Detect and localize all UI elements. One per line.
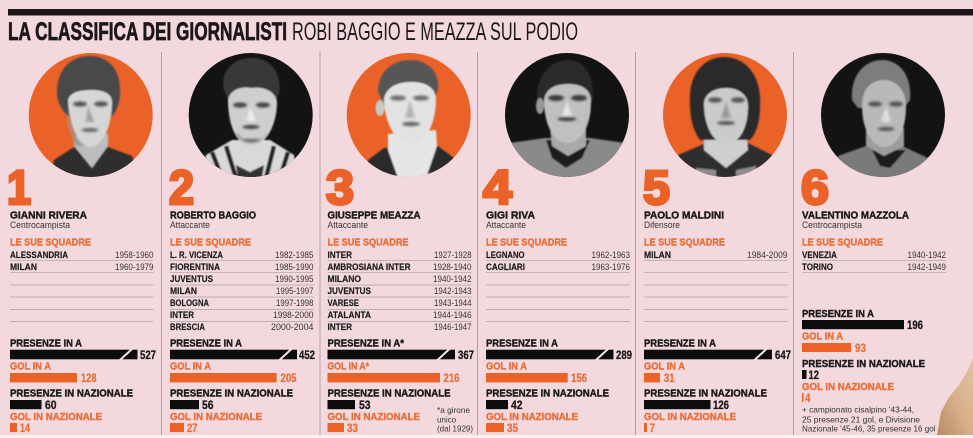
stats bars: PRESENZE IN A: [10, 338, 82, 350]
stats bars: 12: [808, 370, 819, 382]
panel: Gianni Rivera: [7, 52, 156, 435]
teams table: AMBROSIANA INTER: [328, 262, 411, 272]
stats bars: PRESENZE IN NAZIONALE: [644, 388, 767, 400]
panel: Paolo Maldini: [643, 52, 791, 435]
stats bars: [328, 338, 474, 435]
teams table: MILAN: [10, 262, 37, 272]
player name: GIANNI RIVERA: [10, 210, 87, 222]
stats bars: GOL IN NAZIONALE: [10, 411, 102, 423]
stats bars: 60: [45, 400, 56, 412]
panel: Gigi Riva: [483, 52, 632, 435]
stats bars: [644, 338, 791, 435]
stats bars: GOL IN NAZIONALE: [802, 381, 894, 393]
teams table: [802, 250, 946, 273]
teams table: TORINO: [802, 262, 833, 272]
teams table: 1943-1944: [434, 298, 472, 308]
footnote: [437, 406, 473, 434]
teams table: [486, 250, 630, 322]
teams table: 1962-1963: [592, 250, 630, 260]
stats bars: PRESENZE IN A: [486, 338, 558, 350]
footnote: (dal 1929): [437, 425, 473, 434]
stats bars: GOL IN A: [644, 361, 685, 373]
teams table: MILAN: [644, 250, 671, 260]
stats bars: 367: [458, 350, 474, 362]
teams table: MILANO: [328, 274, 361, 284]
player name: VALENTINO MAZZOLA: [802, 210, 909, 222]
teams heading: LE SUE SQUADRE: [644, 237, 725, 249]
teams table: 1998-2000: [273, 310, 314, 320]
stats bars: PRESENZE IN A: [802, 308, 874, 320]
teams table: 1985-1990: [275, 262, 314, 272]
stats bars: 53: [359, 400, 370, 412]
stats bars: [10, 338, 156, 435]
teams table: 1940-1942: [908, 250, 946, 260]
teams table: L. R. VICENZA: [170, 250, 223, 260]
stats bars: 7: [650, 423, 655, 435]
teams table: JUVENTUS: [328, 286, 371, 296]
teams table: VARESE: [328, 298, 359, 308]
player name: GIUSEPPE MEAZZA: [328, 210, 421, 222]
stats bars: 93: [855, 343, 866, 355]
stats bars: 14: [20, 423, 30, 435]
stats bars: PRESENZE IN A: [644, 338, 716, 350]
teams heading: LE SUE SQUADRE: [328, 237, 408, 249]
teams heading: LE SUE SQUADRE: [170, 237, 251, 249]
teams table: [170, 250, 314, 332]
panel: Giuseppe Meazza: [326, 52, 474, 435]
teams heading: LE SUE SQUADRE: [10, 237, 91, 249]
panel: Roberto Baggio: [169, 52, 315, 435]
player role: Attaccante: [486, 220, 526, 230]
teams table: 1940-1942: [433, 274, 472, 284]
stats bars: PRESENZE IN NAZIONALE: [328, 388, 450, 400]
stats bars: [802, 308, 925, 405]
stats bars: GOL IN NAZIONALE: [328, 411, 420, 423]
stats bars: 56: [202, 400, 214, 412]
footnote: [802, 406, 936, 434]
player name: PAOLO MALDINI: [644, 210, 724, 222]
stats bars: PRESENZE IN NAZIONALE: [170, 388, 293, 400]
stats bars: GOL IN NAZIONALE: [170, 411, 262, 423]
teams heading: LE SUE SQUADRE: [802, 237, 883, 249]
footnote: 25 presenze 21 gol, e Divisione: [802, 416, 920, 424]
stats bars: [170, 338, 315, 435]
portrait: Giuseppe Meazza: [346, 52, 472, 178]
photo fragment: bottom right: [937, 358, 973, 435]
teams table: 1982-1985: [275, 250, 314, 260]
stats bars: 156: [571, 373, 587, 385]
stats bars: 27: [187, 423, 198, 435]
teams table: 1944-1946: [433, 310, 472, 320]
portrait: Gianni Rivera: [28, 52, 154, 178]
portrait: Roberto Baggio: [188, 52, 314, 178]
portrait: Paolo Maldini: [663, 52, 787, 178]
teams table: ATALANTA: [328, 310, 371, 320]
stats bars: GOL IN A: [170, 361, 211, 373]
teams table: 2000-2004: [271, 322, 314, 332]
footnote: + campionato cisalpino '43-44,: [802, 406, 914, 415]
teams table: 1946-1947: [434, 322, 472, 332]
stats bars: GOL IN A: [802, 330, 843, 342]
stats bars: PRESENZE IN A: [170, 338, 242, 350]
player name: ROBERTO BAGGIO: [170, 210, 256, 222]
stats bars: 4: [805, 393, 811, 405]
stats bars: GOL IN NAZIONALE: [644, 411, 736, 423]
footnote: unico: [437, 416, 456, 425]
teams table: FIORENTINA: [170, 262, 220, 272]
teams table: 1984-2009: [747, 250, 788, 260]
stats bars: 35: [507, 423, 519, 435]
stats bars: 216: [444, 373, 460, 385]
teams table: INTER: [170, 310, 194, 320]
stats bars: PRESENZE IN NAZIONALE: [10, 388, 133, 400]
stats bars: 647: [775, 350, 791, 362]
player role: Attaccante: [170, 220, 210, 230]
footnote: Nazionale '45-46, 35 presenze 16 gol: [802, 425, 936, 434]
stats bars: PRESENZE IN NAZIONALE: [486, 388, 609, 400]
stats bars: PRESENZE IN A*: [328, 338, 405, 350]
stats bars: [486, 338, 632, 435]
teams table: [328, 250, 472, 332]
teams table: 1928-1940: [433, 262, 472, 272]
teams table: 1942-1943: [434, 286, 472, 296]
player name: GIGI RIVA: [486, 210, 535, 222]
teams table: 1958-1960: [115, 250, 154, 260]
rank number: 2: [169, 162, 194, 215]
stats bars: GOL IN A: [10, 361, 51, 373]
teams table: [10, 250, 154, 322]
stats bars: GOL IN A*: [328, 361, 370, 373]
player role: Centrocampista: [10, 220, 70, 230]
stats bars: 527: [140, 350, 156, 362]
teams table: ALESSANDRIA: [10, 250, 68, 260]
stats bars: 196: [907, 320, 923, 332]
teams heading: LE SUE SQUADRE: [486, 237, 567, 249]
stats bars: 31: [664, 373, 675, 385]
player role: Centrocampista: [802, 220, 862, 230]
stats bars: GOL IN NAZIONALE: [486, 411, 578, 423]
teams table: 1997-1998: [276, 298, 314, 308]
teams table: LEGNANO: [486, 250, 524, 260]
teams table: [644, 250, 788, 322]
teams table: 1963-1976: [592, 262, 630, 272]
stats bars: 33: [347, 423, 358, 435]
stats bars: 42: [511, 400, 522, 412]
teams table: 1995-1997: [276, 286, 314, 296]
footnote: *a girone: [437, 406, 470, 415]
portrait: Gigi Riva: [505, 52, 629, 178]
teams table: BRESCIA: [170, 322, 205, 332]
teams table: VENEZIA: [802, 250, 837, 260]
teams table: 1960-1979: [115, 262, 154, 272]
stats bars: 205: [280, 373, 297, 385]
stats bars: 289: [616, 350, 632, 362]
rank number: 4: [483, 162, 512, 215]
rank number: 6: [801, 162, 829, 215]
rank number: 3: [326, 162, 354, 215]
portrait: Valentino Mazzola: [821, 52, 945, 178]
player role: Difensore: [644, 220, 680, 230]
rank number: 1: [7, 162, 31, 215]
teams table: INTER: [328, 322, 352, 332]
stats bars: 452: [299, 350, 315, 362]
teams table: CAGLIARI: [486, 262, 525, 272]
panel: Valentino Mazzola: [801, 52, 946, 434]
teams table: 1942-1949: [908, 262, 946, 272]
teams table: JUVENTUS: [170, 274, 213, 284]
rank number: 5: [643, 162, 670, 215]
stats bars: 128: [81, 373, 97, 385]
title: LA CLASSIFICA DEI GIORNALISTI: [8, 18, 287, 46]
teams table: MILAN: [170, 286, 197, 296]
teams table: INTER: [328, 250, 352, 260]
title: ROBI BAGGIO E MEAZZA SUL PODIO: [292, 18, 578, 46]
teams table: 1990-1995: [275, 274, 314, 284]
teams table: 1927-1928: [434, 250, 472, 260]
player role: Attaccante: [328, 220, 368, 230]
teams table: BOLOGNA: [170, 298, 209, 308]
stats bars: GOL IN A: [486, 361, 527, 373]
stats bars: PRESENZE IN NAZIONALE: [802, 358, 925, 370]
stats bars: 126: [713, 400, 729, 412]
